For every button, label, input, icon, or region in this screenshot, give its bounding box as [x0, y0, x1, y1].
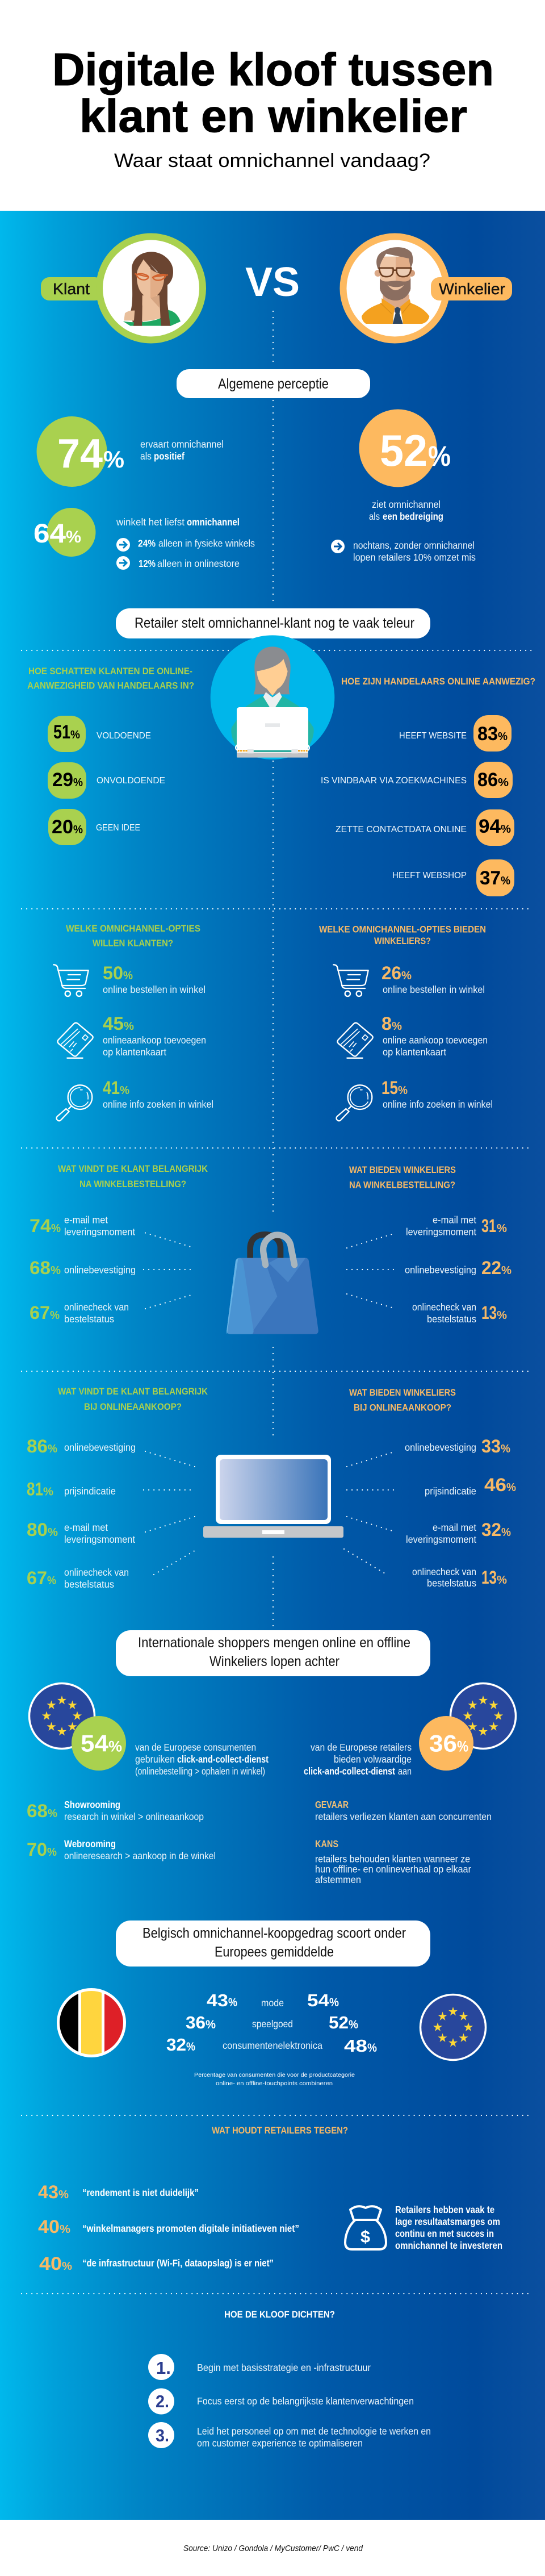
step 2: Focus eerst op de belangrijkste klantenverwachtingen: [197, 2395, 414, 2407]
label pill: Klant: [41, 277, 103, 300]
text: gevaar: [315, 1799, 492, 1822]
icon: cart: [53, 965, 89, 996]
stat: 29% onvoldoende: 29: [52, 769, 73, 791]
stat: 86% bevestiging: 86: [27, 1436, 48, 1456]
connector dots around bag: [144, 1233, 398, 1309]
text: gevaar: GEVAAR: [315, 1799, 349, 1810]
stat: 52%: [359, 409, 451, 487]
stat: 67% bestelstatus: 67: [27, 1568, 47, 1588]
icon: arrow: [116, 538, 130, 552]
text: bedreiging: als: [369, 511, 380, 522]
stat: 13% bestelstatus: [412, 1566, 507, 1589]
comparison: mode: %: [228, 1996, 237, 2009]
stat: 67% bestelstatus: %: [47, 1575, 56, 1587]
stat: 70% webrooming: onlineresearch > aankoop in de winkel: [64, 1850, 216, 1861]
comparison: consumentenelektronica: %: [186, 2040, 195, 2053]
stat: 86% zoekmachines: IS VINDBAAR VIA ZOEKMACHINES: [321, 776, 467, 786]
stat: 68% showrooming: Showrooming: [64, 1799, 120, 1810]
footnote: Percentage van consumenten die voor de productcategorie: [194, 2072, 355, 2078]
stat: 26% online bestellen: [382, 963, 485, 995]
text: europese retailers: van de Europese retailers: [311, 1742, 412, 1753]
stat: 74% e-mail: [30, 1214, 135, 1237]
stat: 29% onvoldoende: %: [73, 776, 83, 789]
text: europese retailers: [304, 1742, 412, 1777]
stat: 31% e-mail: [406, 1214, 507, 1237]
heading: opties klanten: WELKE OMNICHANNEL-OPTIES: [66, 924, 200, 934]
stat: 41% info zoeken: %: [120, 1084, 129, 1097]
icon: cart: [333, 965, 368, 996]
icon: EU flag right: [451, 1684, 515, 1748]
stat: 94% contactdata: ZETTE CONTACTDATA ONLINE: [336, 825, 467, 834]
vertical dotted divider: [272, 311, 274, 1629]
text: kans: hun offline- en onlineverhaal op elkaar: [315, 1863, 471, 1874]
stat: 67% bestelstatus: onlinecheck van: [64, 1301, 129, 1313]
text: positief: ervaart omnichannel: [140, 439, 224, 450]
stat: 70% webrooming: %: [47, 1846, 57, 1859]
comparison: mode: 43: [207, 1990, 228, 2010]
text: gevaar: retailers verliezen klanten aan concurrenten: [315, 1811, 492, 1822]
heading: winkeliers bij onlineaankoop: BIJ ONLINEAANKOOP?: [354, 1403, 451, 1413]
stat: 86% zoekmachines: [321, 762, 513, 798]
heading pill: Belgisch omnichannel-koopgedrag: Belgisch omnichannel-koopgedrag scoort onder: [142, 1926, 406, 1942]
stat: 74% e-mail: 74: [30, 1216, 51, 1236]
stat: 46% prijsindicatie: prijsindicatie: [425, 1485, 476, 1497]
circle: winkelier: [343, 236, 446, 340]
step 2: 2.: [156, 2391, 169, 2411]
stat: 8% klantenkaart: 8: [382, 1013, 392, 1034]
stat: 43% rendement: “rendement is niet duidelijk”: [82, 2187, 199, 2198]
icon: EU flag: [420, 1995, 486, 2060]
stat: 40% winkelmanagers: [38, 2216, 299, 2237]
step 1: 1.: [156, 2358, 171, 2378]
icon: magnifier: [336, 1085, 372, 1121]
stat: 37% webshop: [392, 859, 514, 896]
stat: 64%: %: [66, 528, 81, 546]
comparison: speelgoed: speelgoed: [252, 2018, 293, 2030]
title: klant en winkelier: [79, 91, 467, 142]
stat: 15% info zoeken: [382, 1078, 493, 1110]
heading: klant na winkelbestelling: NA WINKELBESTELLING?: [79, 1179, 186, 1189]
stat: 51% voldoende: [48, 716, 151, 752]
comparison: speelgoed: 52: [329, 2013, 349, 2032]
text: resultaatsmarges: omnichannel te investeren: [395, 2240, 502, 2251]
stat: 67% bestelstatus: 67: [30, 1302, 50, 1323]
text: VS: VS: [245, 260, 300, 305]
stat: 46% prijsindicatie: [425, 1475, 516, 1497]
heading: wat houdt retailers tegen: WAT HOUDT RETAILERS TEGEN?: [212, 2126, 348, 2136]
text: positief: positief: [154, 450, 185, 462]
icon: EU flag left: [30, 1684, 94, 1748]
subtitle: Waar staat omnichannel vandaag?: [114, 150, 430, 172]
stat: 40% infrastructuur: “de infrastructuur (Wi-Fi, dataopslag) is er niet”: [82, 2257, 274, 2269]
stat: 68% showrooming: research in winkel > onlineaankoop: [64, 1811, 204, 1822]
stat: 36% click-and-collect: 36: [429, 1730, 457, 1756]
heading pill: Internationale shoppers: [116, 1630, 430, 1676]
stat: 43% rendement: %: [58, 2189, 69, 2201]
label pill: Winkelier: [431, 277, 512, 300]
stat: 8% klantenkaart: online aankoop toevoegen: [383, 1034, 488, 1046]
comparison: consumentenelektronica: 48: [344, 2036, 367, 2056]
heading: opties winkeliers: WELKE OMNICHANNEL-OPTIES BIEDEN: [319, 925, 486, 935]
text: bedreiging: [369, 499, 443, 522]
text: positief: als: [140, 450, 152, 462]
stat: 68% showrooming: 68: [27, 1801, 48, 1821]
comparison: consumentenelektronica: consumentenelektronica: [223, 2040, 322, 2051]
stat: 43% rendement: 43: [38, 2182, 58, 2202]
stat: 80% e-mail: e-mail met: [64, 1522, 108, 1533]
heading: winkeliers bij onlineaankoop: [349, 1388, 456, 1413]
heading: opties winkeliers: [319, 925, 486, 946]
icon: Belgian flag: [57, 1988, 126, 2057]
stat: 51% voldoende: 51: [53, 721, 70, 743]
stat: 45% klantenkaart: 45: [103, 1013, 124, 1034]
icon: arrow: [331, 540, 345, 553]
stat: 13% bestelstatus: bestelstatus: [427, 1577, 476, 1589]
stat: 94% contactdata: [336, 809, 514, 846]
text: omzet mis: [353, 540, 476, 563]
stat: 86% bevestiging: onlinebevestiging: [64, 1442, 136, 1453]
source: Source: Unizo / Gondola / MyCustomer/ PwC / vend: [183, 2544, 363, 2553]
stat: 83% website: [399, 715, 512, 751]
text: kans: [315, 1838, 471, 1885]
heading: winkeliers na winkelbestelling: [349, 1165, 456, 1191]
stat: 13% bestelstatus: onlinecheck van: [412, 1301, 476, 1313]
stat: 33% bevestiging: %: [501, 1443, 510, 1455]
stat: 40% winkelmanagers: 40: [38, 2216, 60, 2237]
text: resultaatsmarges: continu en met succes in: [395, 2228, 494, 2239]
stat: 86% zoekmachines: %: [498, 776, 509, 789]
stat: 67% bestelstatus: [30, 1301, 129, 1325]
text: omzet mis: nochtans, zonder omnichannel: [353, 540, 475, 551]
stat: 45% klantenkaart: onlineaankoop toevoegen: [103, 1034, 206, 1046]
stat: 83% website: 83: [477, 723, 498, 745]
stat: 15% info zoeken: %: [398, 1084, 408, 1097]
stat: 31% e-mail: e-mail met: [433, 1214, 476, 1226]
stat: 74%: [36, 416, 124, 487]
stat: 67% bestelstatus: %: [50, 1309, 60, 1322]
stat: 31% e-mail: 31: [481, 1216, 496, 1236]
heading: klant bij onlineaankoop: BIJ ONLINEAANKOOP?: [84, 1402, 182, 1412]
stat: 40% winkelmanagers: %: [60, 2223, 70, 2236]
stat: 41% info zoeken: [103, 1078, 213, 1110]
text: 24%: 24%: [138, 537, 156, 549]
stat: 13% bestelstatus: 13: [481, 1567, 497, 1588]
stat: 37% webshop: 37: [480, 867, 501, 889]
stat: 54% click-and-collect: 54: [81, 1730, 109, 1756]
stat: 64%: 64: [33, 518, 66, 548]
icon: laptop: [203, 1455, 343, 1538]
icon: woman: [123, 252, 181, 326]
stat: 29% onvoldoende: ONVOLDOENDE: [97, 776, 165, 786]
stat: 86% zoekmachines: 86: [477, 769, 498, 791]
stat: 22% bevestiging: 22: [481, 1258, 501, 1278]
text: 12%: alleen in onlinestore: [157, 558, 240, 569]
heading: klant bij onlineaankoop: WAT VINDT DE KLANT BELANGRIJK: [58, 1387, 208, 1397]
comparison: speelgoed: %: [349, 2018, 358, 2031]
heading: winkeliers na winkelbestelling: NA WINKELBESTELLING?: [349, 1180, 455, 1191]
stat: 13% bestelstatus: %: [497, 1574, 507, 1586]
stat: 86% bevestiging: [27, 1436, 136, 1456]
heading: klanten schatting: [27, 666, 194, 691]
text: europese retailers: click-and-collect-dienst: [304, 1765, 395, 1777]
heading pill: Internationale shoppers: Internationale shoppers mengen online en offline: [138, 1635, 410, 1651]
stat: 81% prijsindicatie: %: [43, 1486, 53, 1498]
stat: 80% e-mail: [27, 1519, 135, 1545]
connector dots around laptop: [144, 1451, 398, 1575]
text: europese retailers: bieden volwaardige: [334, 1753, 412, 1765]
stat: 50% online bestellen: [103, 963, 206, 995]
heading pill: Internationale shoppers: Winkeliers lopen achter: [209, 1654, 339, 1669]
comparison: mode: %: [329, 1996, 339, 2009]
text: 12%: 12%: [139, 558, 156, 569]
heading: hoe de kloof dichten: HOE DE KLOOF DICHTEN?: [224, 2310, 335, 2320]
stat: 40% infrastructuur: [39, 2253, 274, 2274]
heading: opties klanten: [66, 924, 200, 949]
stat: 22% bevestiging: onlinebevestiging: [405, 1264, 476, 1276]
step 3: Leid het personeel op om met de technologie te werken en: [197, 2425, 431, 2437]
icon: card: [57, 1023, 93, 1058]
icon: money bag: [345, 2206, 386, 2249]
heading pill: Belgisch omnichannel-koopgedrag: Europees gemiddelde: [215, 1944, 334, 1960]
stat: 94% contactdata: %: [501, 823, 511, 836]
heading: opties klanten: WILLEN KLANTEN?: [93, 938, 173, 949]
text: positief: [140, 439, 224, 462]
title: [52, 44, 494, 142]
stat: 45% klantenkaart: op klantenkaart: [103, 1046, 166, 1058]
stat: 22% bevestiging: %: [501, 1264, 512, 1277]
text: winkelt omnichannel: omnichannel: [187, 516, 240, 528]
stat: 50% online bestellen: %: [123, 970, 133, 982]
text: europese consumenten: gebruiken: [135, 1753, 175, 1765]
stat: 74%: %: [103, 446, 124, 473]
icon: agent with laptop: [211, 635, 334, 759]
stat: 13% bestelstatus: bestelstatus: [427, 1313, 476, 1325]
text: resultaatsmarges: lage resultaatsmarges om: [395, 2216, 500, 2227]
icon: card: [337, 1023, 373, 1058]
stat: 20% geen idee: GEEN IDEE: [96, 823, 140, 833]
stat: 68% showrooming: [27, 1799, 204, 1822]
stat: 36% click-and-collect: %: [457, 1738, 468, 1755]
stat: 51% voldoende: VOLDOENDE: [97, 731, 151, 741]
heading: klant na winkelbestelling: WAT VINDT DE KLANT BELANGRIJK: [58, 1164, 208, 1174]
stat: 40% infrastructuur: 40: [39, 2253, 62, 2274]
stat: 20% geen idee: [48, 809, 140, 845]
comparison: speelgoed: [186, 2013, 358, 2032]
heading: klant na winkelbestelling: [58, 1164, 208, 1189]
text: europese consumenten: van de Europese consumenten: [135, 1742, 256, 1753]
stat: 52%: %: [428, 440, 451, 472]
text: kans: afstemmen: [315, 1874, 361, 1885]
stat: 50% online bestellen: online bestellen in winkel: [103, 984, 206, 995]
heading: klant bij onlineaankoop: [58, 1387, 208, 1412]
panel: klant portrait: [41, 236, 203, 340]
stat: 13% bestelstatus: 13: [481, 1302, 497, 1323]
stat: 31% e-mail: %: [497, 1222, 507, 1235]
text: 24%: alleen in fysieke winkels: [158, 537, 255, 549]
label pill: Winkelier: Winkelier: [439, 280, 505, 298]
stat: 46% prijsindicatie: 46: [484, 1475, 506, 1495]
text: europese retailers: aan: [398, 1765, 412, 1777]
comparison: speelgoed: 36: [186, 2013, 206, 2032]
stat: 31% e-mail: leveringsmoment: [406, 1226, 476, 1237]
stat: 51% voldoende: %: [70, 729, 80, 741]
stat: 67% bestelstatus: bestelstatus: [64, 1579, 114, 1590]
stat: 83% website: %: [498, 730, 508, 743]
text: europese consumenten: [135, 1742, 269, 1777]
icon: man: [362, 247, 429, 324]
stat: 64%: [33, 508, 95, 557]
stat: 32% e-mail: 32: [481, 1519, 501, 1540]
comparison: mode: [207, 1990, 339, 2010]
text: resultaatsmarges: Retailers hebben vaak te: [395, 2204, 494, 2215]
stat: 40% infrastructuur: %: [62, 2260, 72, 2273]
stat: 8% klantenkaart: %: [392, 1020, 402, 1033]
text: kans: retailers behouden klanten wanneer ze: [315, 1853, 470, 1864]
stat: 41% info zoeken: online info zoeken in winkel: [103, 1099, 213, 1110]
stat: 22% bevestiging: [405, 1258, 512, 1278]
stat: 26% online bestellen: 26: [382, 963, 401, 983]
heading pill: Retailer stelt omnichannel-klant: Retailer stelt omnichannel-klant nog te vaak teleur: [135, 615, 414, 631]
panel: winkelier portrait: [343, 236, 512, 340]
stat: 8% klantenkaart: [382, 1013, 488, 1058]
stat: 15% info zoeken: 15: [382, 1078, 398, 1098]
icon: money bag: $: [360, 2228, 370, 2247]
stat: 13% bestelstatus: [412, 1301, 507, 1325]
heading: winkeliers bij onlineaankoop: WAT BIEDEN WINKELIERS: [349, 1388, 456, 1398]
stat: 67% bestelstatus: onlinecheck van: [64, 1567, 129, 1578]
stat: 70% webrooming: Webrooming: [64, 1838, 116, 1849]
stat: 81% prijsindicatie: 81: [27, 1479, 43, 1500]
stat: 26% online bestellen: %: [401, 970, 412, 982]
stat: 41% info zoeken: 41: [103, 1078, 120, 1098]
stat: 68% bevestiging: [30, 1258, 136, 1278]
stat: 74% e-mail: %: [51, 1222, 61, 1235]
stat: 81% prijsindicatie: prijsindicatie: [64, 1485, 116, 1497]
dotted rows: [22, 650, 531, 2294]
stat: 68% bevestiging: 68: [30, 1258, 51, 1278]
stat: 33% bevestiging: [405, 1436, 510, 1456]
text: winkelt omnichannel: [116, 516, 240, 528]
heading pill: Belgisch omnichannel-koopgedrag: [116, 1920, 430, 1967]
stat: 50% online bestellen: 50: [103, 963, 123, 983]
heading pill: Retailer stelt omnichannel-klant: [116, 608, 430, 638]
text: europese consumenten: (onlinebestelling > ophalen in winkel): [135, 1765, 265, 1777]
stat: 40% winkelmanagers: “winkelmanagers promoten digitale initiatieven niet”: [82, 2223, 299, 2234]
text: bedreiging: een bedreiging: [383, 511, 443, 522]
stat: 20% geen idee: 20: [52, 816, 73, 838]
comparison: mode: 54: [307, 1990, 330, 2010]
stat: 83% website: HEEFT WEBSITE: [399, 731, 467, 741]
stat: 13% bestelstatus: onlinecheck van: [412, 1566, 476, 1577]
stat: 32% e-mail: %: [501, 1526, 511, 1539]
stat: 20% geen idee: %: [73, 824, 83, 836]
text: bedreiging: ziet omnichannel: [372, 499, 441, 510]
stat: 80% e-mail: 80: [27, 1519, 48, 1540]
heading: handelaars aanwezig: HOE ZIJN HANDELAARS ONLINE AANWEZIG?: [341, 677, 535, 687]
label pill: Klant: Klant: [53, 280, 90, 298]
stat: 33% bevestiging: 33: [481, 1436, 501, 1456]
icon: shopping bag: [227, 1234, 318, 1334]
stat: 68% bevestiging: %: [51, 1264, 61, 1277]
heading: klanten schatting: AANWEZIGHEID VAN HANDELAARS IN?: [27, 680, 194, 691]
stat: 37% webshop: %: [501, 875, 510, 887]
stat: 74% e-mail: leveringsmoment: [64, 1226, 135, 1237]
heading: klanten schatting: HOE SCHATTEN KLANTEN DE ONLINE-: [28, 666, 192, 677]
step 3: om customer experience te optimaliseren: [197, 2437, 363, 2449]
comparison: consumentenelektronica: 32: [166, 2035, 186, 2055]
footnote: online- en offline-touchpoints combineren: [216, 2080, 333, 2087]
icon: arrow: [116, 556, 130, 570]
stat: 36% click-and-collect: [419, 1716, 473, 1771]
stat: 68% bevestiging: onlinebevestiging: [64, 1264, 136, 1276]
stat: 54% click-and-collect: [72, 1716, 126, 1771]
heading: opties winkeliers: WINKELIERS?: [374, 936, 431, 946]
stat: 94% contactdata: 94: [479, 816, 501, 837]
stat: 80% e-mail: %: [48, 1526, 58, 1539]
step 1: [148, 2354, 371, 2380]
text: europese consumenten: click-and-collect-dienst: [177, 1753, 269, 1765]
stat: 52%: 52: [380, 425, 427, 475]
title: Digitale kloof tussen: [52, 44, 494, 95]
text: omzet mis: lopen retailers 10% omzet mis: [353, 552, 476, 563]
step 3: [148, 2422, 431, 2449]
comparison: mode: mode: [261, 1997, 284, 2009]
step 2: [148, 2388, 414, 2414]
circle: klant: [99, 236, 203, 340]
stat: 46% prijsindicatie: %: [506, 1481, 516, 1494]
heading: winkeliers na winkelbestelling: WAT BIEDEN WINKELIERS: [349, 1165, 456, 1175]
text: kans: KANS: [315, 1838, 338, 1849]
text: winkelt omnichannel: winkelt het liefst: [116, 516, 185, 528]
stat: 37% webshop: HEEFT WEBSHOP: [392, 871, 467, 880]
stat: 32% e-mail: e-mail met: [433, 1522, 476, 1533]
stat: 68% showrooming: %: [48, 1807, 57, 1820]
heading pill: Algemene perceptie: [177, 369, 370, 398]
stat: 13% bestelstatus: %: [497, 1309, 507, 1322]
stat: 43% rendement: [38, 2182, 199, 2202]
stat: 32% e-mail: leveringsmoment: [406, 1534, 476, 1545]
stat: 15% info zoeken: online info zoeken in winkel: [383, 1099, 493, 1110]
stat: 29% onvoldoende: [48, 762, 165, 799]
stat: 67% bestelstatus: [27, 1567, 129, 1590]
comparison: consumentenelektronica: %: [367, 2041, 377, 2055]
step 1: Begin met basisstrategie en -infrastructuur: [197, 2362, 371, 2373]
stat: 67% bestelstatus: bestelstatus: [64, 1313, 114, 1325]
stat: 8% klantenkaart: op klantenkaart: [383, 1046, 446, 1058]
stat: 45% klantenkaart: [103, 1013, 206, 1058]
stat: 70% webrooming: 70: [27, 1839, 47, 1860]
heading pill: Algemene perceptie: Algemene perceptie: [218, 376, 329, 392]
stat: 45% klantenkaart: %: [124, 1020, 134, 1033]
stat: 33% bevestiging: onlinebevestiging: [405, 1442, 476, 1453]
stat: 74%: 74: [57, 431, 103, 477]
comparison: consumentenelektronica: [166, 2035, 377, 2056]
stat: 54% click-and-collect: %: [108, 1738, 122, 1755]
footnote: [194, 2072, 355, 2087]
text: resultaatsmarges: [395, 2204, 502, 2251]
comparison: speelgoed: %: [206, 2018, 216, 2031]
stat: 70% webrooming: [27, 1838, 216, 1861]
stat: 26% online bestellen: online bestellen in winkel: [383, 984, 485, 995]
stat: 74% e-mail: e-mail met: [64, 1214, 108, 1226]
step 3: 3.: [156, 2425, 169, 2445]
icon: magnifier: [56, 1085, 92, 1121]
stat: 32% e-mail: [406, 1519, 511, 1545]
stat: 80% e-mail: leveringsmoment: [64, 1534, 135, 1545]
stat: 81% prijsindicatie: [27, 1479, 116, 1500]
stat: 86% bevestiging: %: [48, 1443, 57, 1455]
